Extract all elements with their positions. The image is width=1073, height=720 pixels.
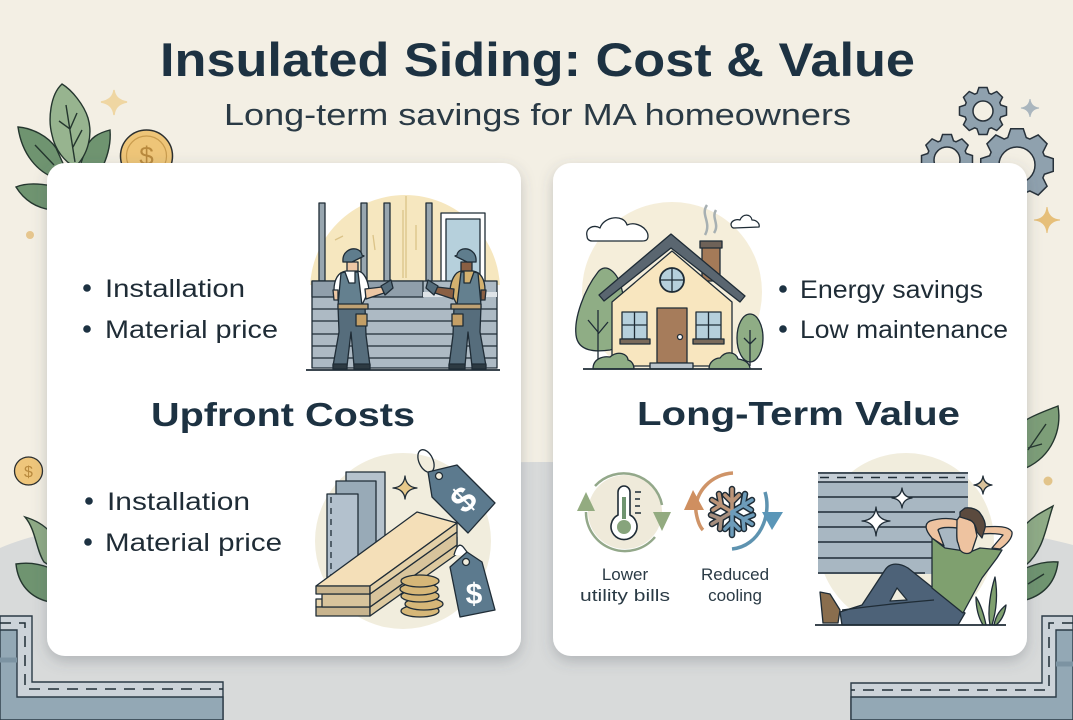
icon: thermometer with cycle arrows xyxy=(577,473,671,551)
label: reduced cooling xyxy=(701,565,769,605)
decoration: top-left gold coin: $ xyxy=(139,141,154,171)
icon: snowflake with cycle arrows xyxy=(684,473,783,549)
panel heading: long-term value: Long-Term Value xyxy=(637,395,960,432)
bullet list: bottom xyxy=(84,488,282,557)
decoration: top-left leaves xyxy=(16,84,110,210)
illustration: relaxing homeowner beside siding xyxy=(815,453,1012,629)
label: reduced cooling: Reduced xyxy=(701,565,769,584)
worker left xyxy=(333,249,393,369)
label: lower utility bills: Lower xyxy=(602,565,648,584)
label: reduced cooling: cooling xyxy=(708,586,762,605)
decoration: lower-left leaves xyxy=(16,517,50,602)
card background xyxy=(553,163,1027,656)
label: lower utility bills: utility bills xyxy=(580,586,670,605)
decoration: bottom-left siding corner xyxy=(0,616,223,720)
decoration: top-left gold coin xyxy=(120,130,172,182)
title: Insulated Siding: Cost & Value xyxy=(160,33,915,86)
card background xyxy=(47,163,521,656)
worker right xyxy=(426,249,486,369)
illustration: siding materials, price tags and coins: $ xyxy=(466,578,483,611)
illustration: siding materials, price tags and coins: $ xyxy=(442,478,485,521)
panel heading: upfront costs: Upfront Costs xyxy=(151,396,415,433)
panel: long-term value xyxy=(553,163,1027,656)
illustration: workers installing siding xyxy=(306,195,500,385)
decoration: small sparkles and dots xyxy=(26,99,1060,486)
bullet list: benefits xyxy=(779,276,1008,344)
bullet list: top: Installation xyxy=(105,275,245,303)
decoration: small left coin xyxy=(14,457,42,485)
bullet list: benefits: Low maintenance xyxy=(800,316,1008,344)
decoration: gold sparkle xyxy=(101,90,127,115)
decoration: right leaves xyxy=(1026,406,1059,600)
bullet list: benefits: Energy savings xyxy=(800,276,983,304)
bullet list: bottom: Material price xyxy=(105,529,282,557)
bullet list: top: Material price xyxy=(105,316,278,344)
bullet list: bottom: Installation xyxy=(107,488,250,516)
decoration: bottom-right siding corner xyxy=(851,616,1073,720)
illustration: house xyxy=(576,202,763,382)
label: lower utility bills xyxy=(580,565,670,605)
bullet list: top xyxy=(83,275,278,344)
illustration: siding materials, price tags and coins xyxy=(315,447,495,629)
panel: upfront costs xyxy=(47,163,521,656)
decoration: gears xyxy=(922,87,1053,201)
subtitle: Long-term savings for MA homeowners xyxy=(224,97,851,132)
decoration: small left coin: $ xyxy=(24,464,33,481)
